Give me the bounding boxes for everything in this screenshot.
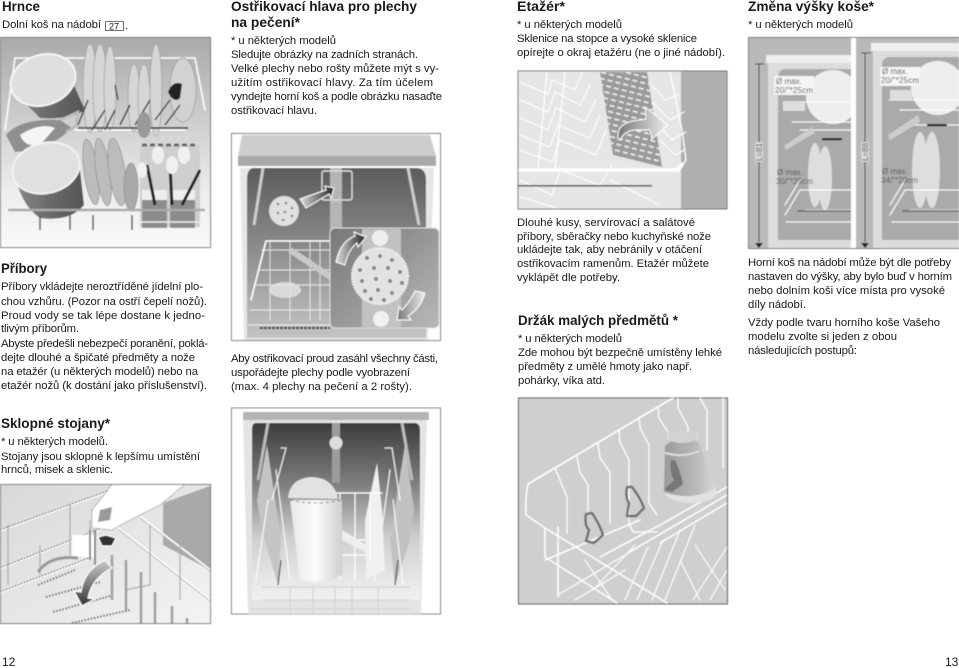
diameter labels <box>880 67 920 185</box>
diameter labels: Ø max. <box>777 168 803 177</box>
body: Etažér: opírejte o okraj etažéru (ne o jiné nádobí). <box>517 47 725 59</box>
column 3: long items text: Dlouhé kusy, servírovací a salátové <box>517 217 695 229</box>
diameter labels: Ø max. <box>882 67 908 76</box>
column 3: long items text: vyklápět dle potřeby. <box>517 272 620 284</box>
column 4: body text: díly nádobí. <box>748 299 806 311</box>
column 3: long items text: ukládejte tak, aby nebránily v otáčení <box>517 244 703 256</box>
diameter labels: 30/"*25cm <box>776 177 813 186</box>
reference to page 27: . <box>125 20 128 32</box>
caption: spray head text: (max. 4 plechy na pečení a 2 rošty). <box>231 381 412 393</box>
reference to page 27: 27 <box>109 22 119 32</box>
height dimension: L=81 <box>755 142 764 161</box>
diameter labels: Ø max. <box>776 77 802 86</box>
left variant <box>749 38 860 249</box>
body: Ostřikovací hlava: Sledujte obrázky na zadních stranách. <box>231 49 418 61</box>
column 1: Sklopné stojany text <box>1 415 201 476</box>
illustration: holder for small items <box>518 398 728 604</box>
spray head, detached <box>269 196 299 226</box>
lower plates <box>808 143 832 210</box>
heading: Příbory: Příbory <box>1 260 47 276</box>
body: Příbory: na etažér (u některých modelů) nebo na <box>1 366 199 378</box>
rack wires <box>0 485 210 601</box>
hand <box>92 480 190 530</box>
column 4: body text: Vždy podle tvaru horního koše Vašeho <box>748 317 940 329</box>
column 1: Příbory text <box>1 260 208 392</box>
arrow up-right <box>336 232 366 265</box>
body: Příbory: Příbory vkládejte neroztříděné jídelní plo- <box>1 281 203 293</box>
rack tines <box>78 85 188 130</box>
column 3: Etažér text <box>517 0 725 59</box>
heading: Ostřikovací hlava: na pečení* <box>231 14 301 30</box>
diameter labels <box>774 76 814 186</box>
column 3: long items text: ostřikovacím ramenům. Etažér můžete <box>517 258 709 270</box>
body: Sklopné stojany: * u některých modelů. <box>1 436 108 448</box>
left sheets <box>256 445 290 585</box>
body: Ostřikovací hlava <box>231 35 442 117</box>
illustration: basket height change <box>748 37 959 249</box>
plate, upper <box>911 61 959 115</box>
illustration: folding racks with hand <box>0 480 210 625</box>
white rack zigzags <box>520 72 686 209</box>
front rack rail <box>8 209 205 211</box>
body: Držák: * u některých modelů <box>518 333 622 345</box>
diameter labels: 20/"*25cm <box>881 76 919 85</box>
arrow down-left <box>397 291 425 320</box>
height dimension <box>755 64 764 248</box>
column 3: long items text <box>517 217 711 284</box>
arrow to mount <box>300 186 334 208</box>
lower pot <box>12 140 84 220</box>
column 2: Ostřikovací hlava text <box>231 0 442 117</box>
caption: spray head text <box>231 353 438 393</box>
fold-down etagere mesh <box>600 72 662 167</box>
right variant <box>856 38 959 249</box>
caption: spray head text: Aby ostřikovací proud zasáhl všechny části, <box>231 353 438 365</box>
body: Držák <box>518 333 722 387</box>
body: Ostřikovací hlava: * u některých modelů <box>231 35 336 47</box>
upper plates <box>83 44 196 136</box>
body: Držák: pohárky, víka atd. <box>518 375 605 387</box>
illustration: baking sheets in dishwasher <box>232 408 440 614</box>
rack wires <box>526 398 727 603</box>
clip mechanism <box>38 530 116 572</box>
column 4: body text: modelu zvolte si jeden z obou <box>748 331 897 343</box>
rack wires <box>336 492 384 580</box>
body: Sklopné stojany: Stojany jsou sklopné k lepšímu umístění <box>1 451 201 463</box>
heading: Držák malých předmětů: Držák malých předmětů * <box>518 312 679 328</box>
column 3: Držák malých předmětů text <box>518 312 722 387</box>
roasting pot <box>288 477 342 582</box>
height dimension <box>861 53 871 248</box>
lower plates <box>79 137 138 211</box>
arrow <box>618 107 668 140</box>
body: Příbory: dejte dlouhé a špičaté předměty a nože <box>1 352 195 364</box>
body: Držák: Zde mohou být bezpečně umístěny lehké <box>518 347 722 359</box>
mounting bracket <box>322 171 352 200</box>
illustration: rack with etagere <box>518 71 727 209</box>
column 4: Změna výšky koše text <box>748 0 875 31</box>
reference to page 27: Dolní koš na nádobí <box>2 19 102 31</box>
diameter labels: Ø max. <box>882 167 908 176</box>
column 4: body text: nastaven do výšky, aby bylo buď v horním <box>748 271 952 283</box>
cutlery basket <box>137 112 200 228</box>
lower rack <box>890 180 959 222</box>
arrow: fold down <box>74 560 112 606</box>
tines <box>112 555 187 625</box>
body: Ostřikovací hlava: ostřikovací hlavu. <box>231 105 317 117</box>
body: Ostřikovací hlava: vyndejte horní koš a podle obrázku nasaďte <box>231 91 442 103</box>
lower plates <box>912 132 940 208</box>
body: Příbory: chou vzhůru. (Pozor na ostří čepelí nožů). <box>1 296 207 308</box>
upper rack <box>888 90 959 140</box>
diameter labels: 34/"*29cm <box>881 176 918 185</box>
plate, upper <box>806 70 860 124</box>
lower rack <box>248 241 340 328</box>
body: Příbory: Abyste předešli nebezpečí poranění, poklá- <box>1 338 208 350</box>
illustration: dishwasher with spray head <box>232 134 440 340</box>
clip 2 <box>626 487 644 516</box>
body: Etažér <box>517 19 725 59</box>
upper pot <box>9 52 84 119</box>
diameter labels: 20/"*25cm <box>775 86 813 95</box>
middle pan <box>6 112 78 152</box>
lower rack <box>785 180 852 222</box>
body: Příbory <box>1 281 208 392</box>
thick rail <box>518 164 682 170</box>
inset detail <box>330 228 439 328</box>
note: some models: * u některých modelů <box>748 19 853 31</box>
column 4: body text: Horní koš na nádobí může být dle potřeby <box>748 257 951 269</box>
body: Sklopné stojany: hrnců, misek a sklenic. <box>1 464 113 476</box>
body: Příbory: etažér nožů (k dostání jako příslušenství). <box>1 380 207 392</box>
clip 1 <box>585 513 603 543</box>
upper rack <box>783 101 852 150</box>
right sheets <box>365 445 414 585</box>
body: Příbory: Proud vody se tak lépe dostane k jedno- <box>1 310 205 322</box>
body: Etažér: Sklenice na stopce a vysoké sklenice <box>517 33 697 45</box>
body: Etažér: * u některých modelů <box>517 19 622 31</box>
body: Sklopné stojany <box>1 436 201 476</box>
body: Ostřikovací hlava: Velké plechy nebo rošty můžete mýt s vy- <box>231 63 439 75</box>
holder clips <box>585 487 644 543</box>
height dimension: L=88 <box>861 142 870 161</box>
heading: Ostřikovací hlava <box>231 0 417 30</box>
heading: Sklopné stojany: Sklopné stojany* <box>1 415 111 431</box>
body: Ostřikovací hlava: užitím ostřikovací hlavy. Za tím účelem <box>231 77 433 89</box>
front rack <box>250 587 410 614</box>
column 1: Hrnce section <box>2 0 128 32</box>
column 4: body text <box>748 257 952 357</box>
column 4: body text: následujících postupů: <box>748 345 857 357</box>
upturned glass <box>664 431 717 503</box>
caption: spray head text: uspořádejte plechy podle vyobrazení <box>231 367 411 379</box>
spray head <box>330 436 342 450</box>
body: Držák: předměty z umělé hmoty jako např. <box>518 361 692 373</box>
rack back rail <box>5 58 205 210</box>
illustration: pots and plates in lower basket <box>0 38 210 248</box>
column 3: long items text: příbory, sběračky nebo kuchyňské nože <box>517 231 711 243</box>
body: Příbory: tlivým příborům. <box>1 323 79 335</box>
column 4: body text: nebo dolním koši více místa pro vysoké <box>748 285 945 297</box>
